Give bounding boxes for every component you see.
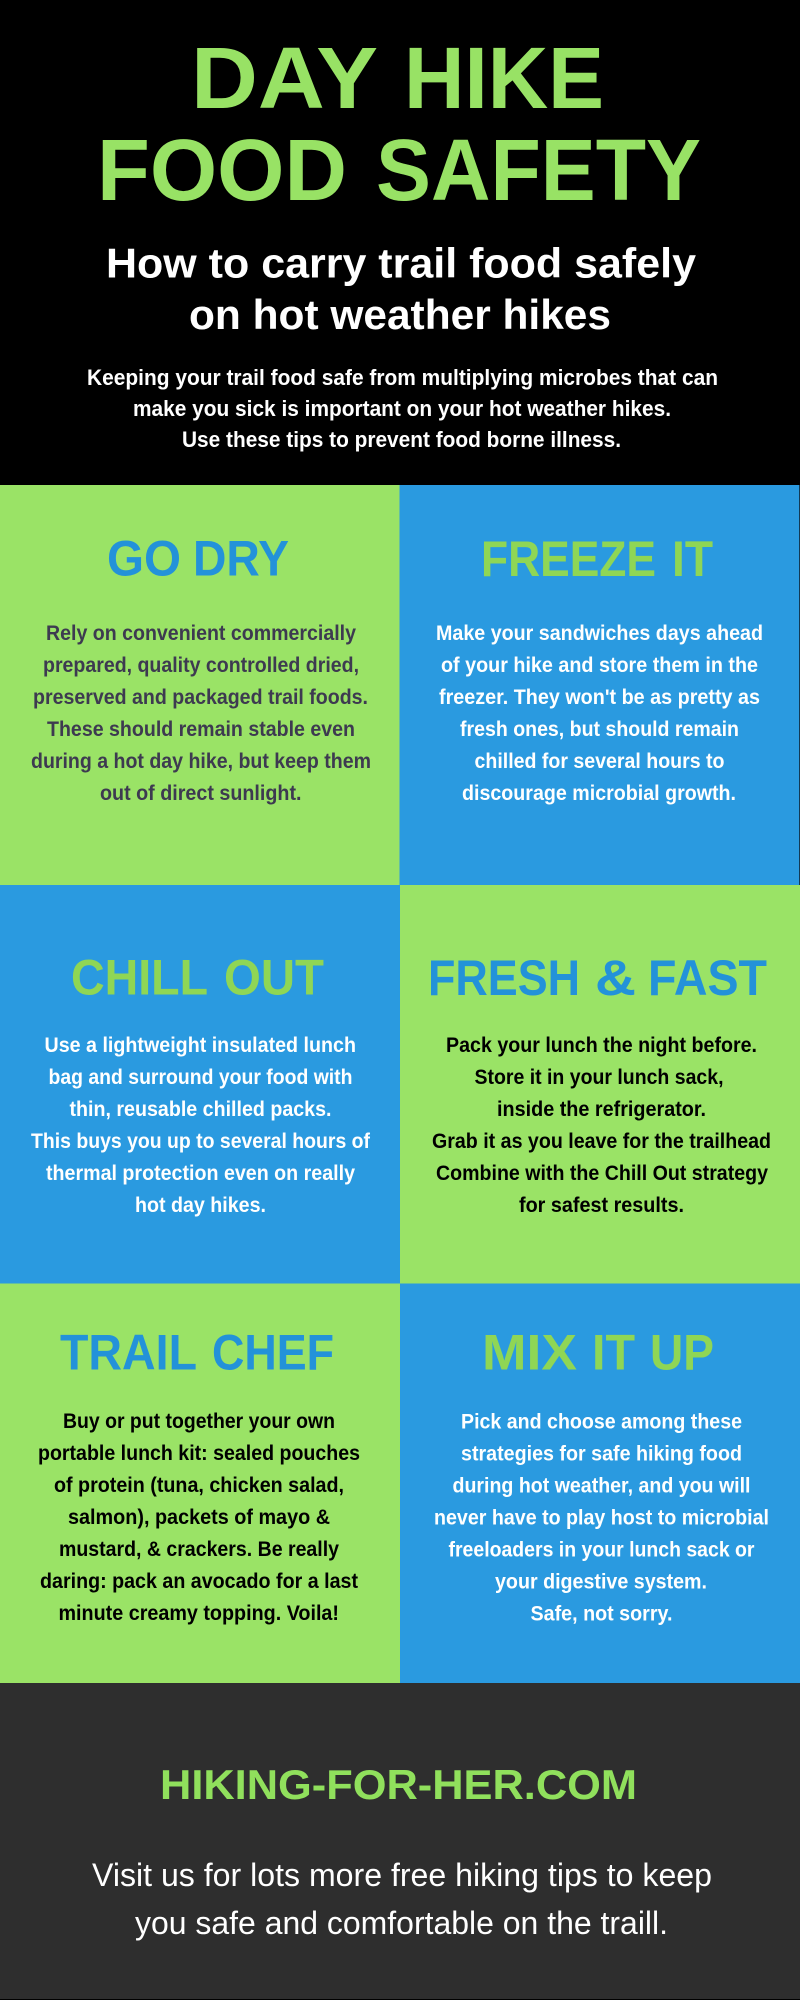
footer text: Visit us for lots more free hiking tips to keep xyxy=(92,1857,712,1893)
text: go dry: Rely on convenient commercially xyxy=(46,622,356,645)
title: HIKE xyxy=(404,30,604,127)
heading: freeze it: FREEZE xyxy=(481,531,656,587)
text: mix it up: your digestive system. xyxy=(495,1570,707,1594)
heading: go dry xyxy=(107,530,289,586)
text: go dry: during a hot day hike, but keep them xyxy=(31,750,371,773)
text: chill out: thin, reusable chilled packs. xyxy=(70,1098,332,1121)
text: chill out: bag and surround your food with xyxy=(48,1066,352,1089)
panel: chill out xyxy=(0,885,400,1284)
panel: fresh and fast xyxy=(400,885,800,1284)
panel: go dry xyxy=(0,485,400,885)
text: trail chef: minute creamy topping. Voila! xyxy=(58,1602,339,1625)
intro text: Use these tips to prevent food borne illness. xyxy=(182,427,621,452)
panel: header xyxy=(0,0,800,485)
text: mix it up: Safe, not sorry. xyxy=(530,1602,672,1626)
heading: fresh and fast: & xyxy=(595,950,636,1006)
text: mix it up: freeloaders in your lunch sack or xyxy=(448,1538,754,1562)
text: freeze it: discourage microbial growth. xyxy=(462,782,736,805)
heading: chill out: CHILL xyxy=(71,950,208,1006)
text: mix it up: never have to play host to microbial xyxy=(434,1506,769,1530)
text: trail chef: daring: pack an avocado for a last xyxy=(40,1570,358,1593)
heading: fresh and fast: FAST xyxy=(648,950,767,1006)
text: go dry: prepared, quality controlled dried, xyxy=(43,654,359,677)
text: go dry xyxy=(31,622,371,805)
text: fresh and fast: Pack your lunch the night before. xyxy=(446,1034,757,1057)
heading: mix it up: UP xyxy=(650,1324,714,1380)
subtitle: How to carry trail food safely xyxy=(106,240,697,286)
text: freeze it: of your hike and store them in the xyxy=(441,654,758,677)
text: go dry: out of direct sunlight. xyxy=(100,782,302,805)
heading: trail chef xyxy=(60,1324,334,1380)
subtitle xyxy=(106,240,697,338)
title: FOOD xyxy=(97,122,347,219)
heading: mix it up: MIX xyxy=(482,1324,577,1380)
text: fresh and fast: Combine with the Chill Out strategy xyxy=(436,1162,768,1185)
heading: chill out xyxy=(71,950,324,1006)
text: chill out: hot day hikes. xyxy=(135,1194,266,1217)
text: mix it up: Pick and choose among these xyxy=(461,1410,742,1434)
footer website name: HIKING-FOR-HER.COM xyxy=(160,1761,637,1808)
footer text: you safe and comfortable on the traill. xyxy=(135,1905,668,1941)
heading: go dry: DRY xyxy=(193,530,289,586)
text: chill out: thermal protection even on really xyxy=(46,1162,355,1185)
text: fresh and fast: Store it in your lunch sack, xyxy=(474,1066,724,1089)
text: mix it up: during hot weather, and you will xyxy=(452,1474,750,1498)
intro text: make you sick is important on your hot weather hikes. xyxy=(133,396,671,421)
text: fresh and fast: inside the refrigerator. xyxy=(497,1098,706,1121)
heading: mix it up xyxy=(482,1324,714,1380)
intro text xyxy=(87,365,718,452)
text: freeze it: Make your sandwiches days ahead xyxy=(436,622,763,645)
title: SAFETY xyxy=(376,122,701,219)
text: fresh and fast: Grab it as you leave for the trailhead xyxy=(432,1130,771,1153)
panel: footer xyxy=(0,1683,800,2000)
footer text xyxy=(92,1857,712,1941)
text: trail chef: Buy or put together your own xyxy=(63,1410,335,1433)
panel: trail chef xyxy=(0,1284,400,1683)
heading: mix it up: IT xyxy=(592,1324,635,1380)
text: freeze it: chilled for several hours to xyxy=(474,750,724,773)
text: trail chef: portable lunch kit: sealed pouches xyxy=(38,1442,360,1465)
heading: trail chef: TRAIL xyxy=(60,1324,197,1380)
heading: fresh and fast xyxy=(428,950,767,1006)
text: go dry: preserved and packaged trail foods. xyxy=(33,686,368,709)
heading: chill out: OUT xyxy=(224,950,324,1006)
text: mix it up: strategies for safe hiking food xyxy=(461,1442,742,1466)
subtitle: on hot weather hikes xyxy=(189,291,611,338)
text: fresh and fast: for safest results. xyxy=(519,1194,684,1217)
heading: go dry: GO xyxy=(107,530,181,586)
title xyxy=(97,30,701,219)
text: mix it up xyxy=(434,1410,769,1626)
title: DAY xyxy=(191,30,378,127)
heading: fresh and fast: FRESH xyxy=(428,950,580,1006)
text: chill out: This buys you up to several hours of xyxy=(31,1130,371,1153)
panel: freeze it xyxy=(400,485,800,885)
text: go dry: These should remain stable even xyxy=(47,718,355,741)
text: trail chef xyxy=(38,1410,360,1625)
text: freeze it xyxy=(436,622,763,805)
text: trail chef: of protein (tuna, chicken salad, xyxy=(54,1474,344,1497)
panel: mix it up xyxy=(400,1284,800,1683)
intro text: Keeping your trail food safe from multiplying microbes that can xyxy=(87,365,718,390)
text: trail chef: salmon), packets of mayo & xyxy=(68,1506,330,1529)
text: chill out: Use a lightweight insulated lunch xyxy=(44,1034,356,1057)
text: trail chef: mustard, & crackers. Be really xyxy=(59,1538,339,1561)
text: freeze it: fresh ones, but should remain xyxy=(460,718,739,741)
text: freeze it: freezer. They won't be as pretty as xyxy=(439,686,760,709)
text: chill out xyxy=(31,1034,371,1217)
heading: freeze it: IT xyxy=(672,531,713,587)
text: fresh and fast xyxy=(432,1034,771,1217)
heading: trail chef: CHEF xyxy=(212,1324,334,1380)
